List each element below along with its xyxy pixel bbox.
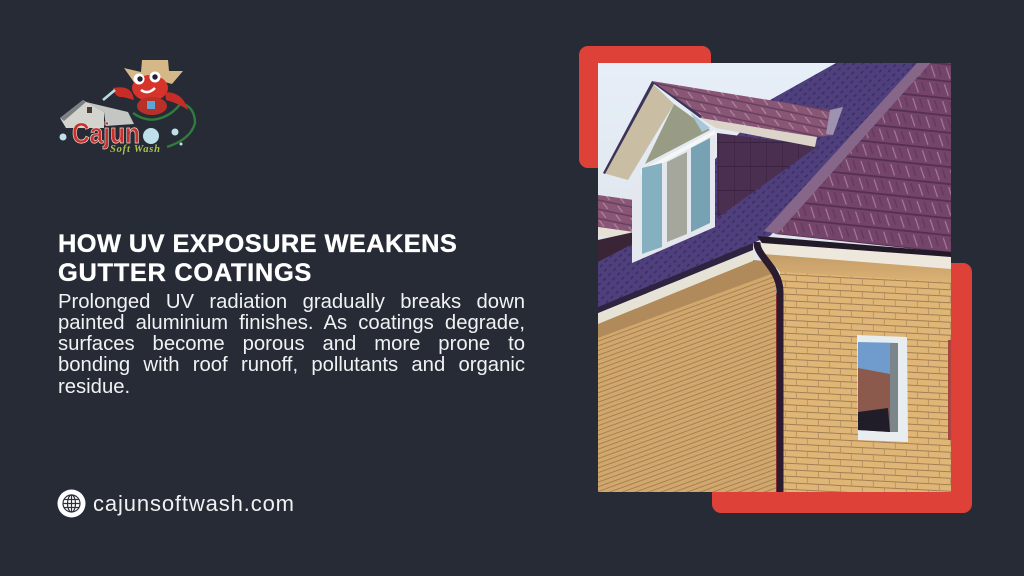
right fascia: [762, 243, 951, 269]
left small roof: [598, 195, 634, 265]
small wall window: [857, 335, 908, 442]
dormer window panes: [642, 163, 662, 254]
dormer side wall: [717, 133, 818, 218]
dormer window frame: [632, 130, 715, 263]
heading: HOW UV EXPOSURE WEAKENS: [58, 230, 457, 258]
body text block: surfaces become porous and more prone to: [58, 332, 525, 354]
icon: soap bubbles: [60, 128, 182, 146]
dormer roof: [652, 81, 843, 137]
roof ridge: [764, 63, 930, 234]
icon: crawfish mascot: [103, 60, 188, 115]
left brick wall: [598, 243, 776, 492]
icon: green hose: [133, 103, 195, 147]
gutter downpipe: [757, 242, 780, 492]
dormer: [603, 81, 843, 263]
logo: Cajun Soft Wash: [60, 60, 196, 155]
gable glass: [645, 104, 710, 164]
right tiled roof: [764, 63, 951, 253]
body text block: residue.: [58, 376, 130, 398]
sliver of far window: [948, 340, 951, 440]
body text block: painted aluminium finishes. As coatings degrade,: [58, 312, 525, 334]
right brick wall: [757, 236, 951, 492]
logo wordmark: Soft Wash: [110, 144, 160, 155]
accent: top-left red block: [579, 46, 711, 168]
icon: globe: [58, 490, 86, 518]
sky: [598, 63, 951, 293]
body text block: [58, 290, 525, 398]
heading: [58, 230, 457, 287]
body text block: bonding with roof runoff, pollutants and organic: [58, 354, 525, 376]
dormer fascia: [700, 118, 817, 147]
body text block: Prolonged UV radiation gradually breaks down: [58, 290, 525, 312]
icon: house: [60, 100, 134, 128]
accent: bottom-right red block: [712, 263, 972, 513]
website address: cajunsoftwash.com: [93, 491, 295, 516]
main purple roof slope: [598, 63, 925, 310]
photo: house roof and gutter: [598, 63, 951, 492]
left fascia: [598, 250, 753, 324]
heading: GUTTER COATINGS: [58, 259, 312, 287]
dormer soffit: [603, 83, 674, 180]
logo wordmark: Cajun: [72, 118, 140, 150]
website link with globe icon: [58, 490, 295, 518]
